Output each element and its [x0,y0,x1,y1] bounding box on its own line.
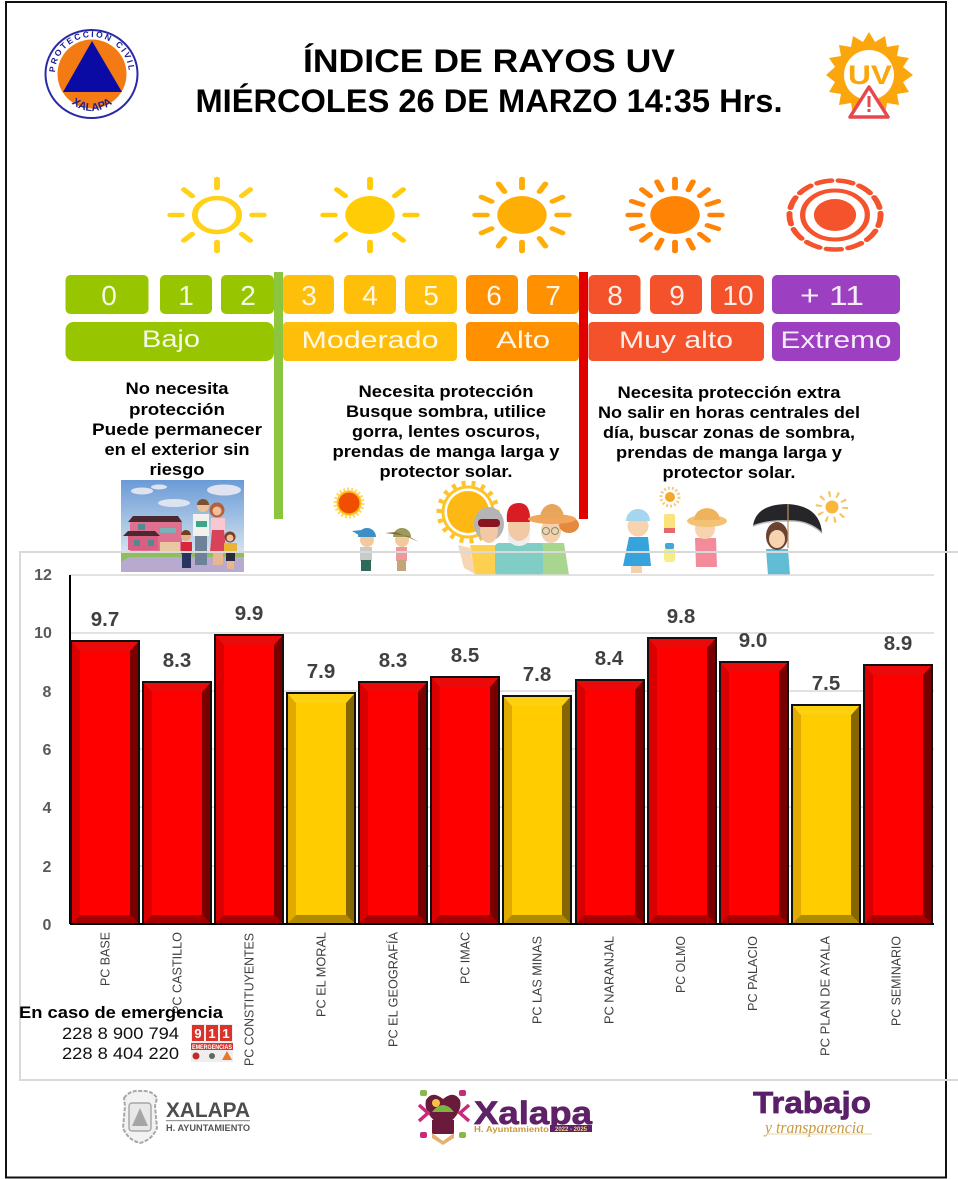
scale: UV index tiles: 7 [545,280,561,311]
icon: 911 emergency: 1 [222,1026,230,1041]
category labels: PC EL GEOGRAFÍA [386,931,400,1047]
icon: sun low [170,179,264,251]
bar: PC PLAN DE AYALA 7.5: 7.5 [812,672,840,695]
text: moderate and high risk advice: gorra, lentes oscuros, [352,422,540,441]
illustration: family outside home [121,480,244,572]
bar: PC EL GEOGRAFÍA 8.3: 8.3 [379,649,407,672]
category labels: PC EL MORAL [314,932,328,1017]
logo: Xalapa 2022-2025: 2022 - 2025 [555,1127,588,1133]
text: low risk advice: en el exterior sin [104,440,250,459]
emergency contact block: 228 8 404 220 [62,1044,179,1063]
category labels: PC CONSTITUYENTES [242,933,256,1066]
scale: risk category labels: Moderado [302,327,438,354]
scale: UV index tiles: 8 [607,280,623,311]
text: very high and extreme risk advice: Necesita protección extra [618,383,841,402]
bar: PC BASE 9.7: 9.7 [91,608,119,631]
chart: UV index by station [20,552,958,1080]
icon: sun very high [628,179,722,251]
y-axis labels [34,567,52,934]
scale: UV index tiles: 2 [240,280,256,311]
emergency contact block [19,1003,224,1063]
scale: risk category labels: Muy alto [619,327,733,354]
text: low risk advice: No necesita [126,379,229,398]
text: very high and extreme risk advice: día, buscar zonas de sombra, [603,423,855,442]
text: very high and extreme risk advice: No salir en horas centrales del [598,403,860,422]
y-axis labels: 10 [34,625,52,642]
scale: UV index tiles: 1 [178,280,194,311]
scale: risk category labels: Alto [496,327,550,354]
y-axis labels: 12 [34,567,52,584]
bar: PC PALACIO 9.0 [720,629,788,924]
bar: PC CASTILLO 8.3 [143,649,211,924]
scale: UV index tiles: 0 [101,280,117,311]
scale: UV index tiles: 3 [301,280,317,311]
bar: PC IMAC 8.5 [431,644,499,924]
scale: UV index tiles: 9 [669,280,685,311]
logo: Protección Civil Xalapa [44,29,138,119]
logo: Xalapa 2022-2025: H. Ayuntamiento [474,1125,549,1134]
bar: PC NARANJAL 8.4: 8.4 [595,647,624,670]
logo: Xalapa H. Ayuntamiento shield [123,1091,250,1143]
logo: Trabajo y transparencia [753,1085,872,1137]
category labels: PC BASE [98,932,112,986]
text: very high and extreme risk advice: protector solar. [662,463,796,482]
icon: sun high [475,179,569,251]
icon: UV warning sun: UV [848,60,892,90]
icon: sun moderate [323,179,417,251]
text: very high and extreme risk advice: prendas de manga larga y [616,443,843,462]
bar: PC EL GEOGRAFÍA 8.3 [359,649,427,924]
category labels: PC PALACIO [746,936,760,1011]
text: very high and extreme risk advice [598,383,860,482]
illustration: girl under umbrella [753,494,845,575]
category labels: PC SEMINARIO [890,936,904,1026]
text: moderate and high risk advice: Busque sombra, utilice [346,402,546,421]
bar: PC LAS MINAS 7.8 [503,663,571,924]
illustration: children with sunscreen [623,488,727,573]
category labels: PC OLMO [674,936,688,993]
bar: PC EL MORAL 7.9: 7.9 [307,660,335,683]
logo: Xalapa 2022-2025 [419,1090,592,1145]
y-axis gridlines and axis [70,575,934,924]
category labels: PC CASTILLO [170,932,184,1014]
y-axis labels: 8 [43,684,52,701]
text: low risk advice: Puede permanecer [92,420,262,439]
bar: PC CASTILLO 8.3: 8.3 [163,649,191,672]
y-axis labels: 2 [43,859,52,876]
scale: risk category labels: Bajo [142,326,200,353]
icon: 911 emergency [191,1024,233,1062]
icon: 911 emergency: EMERGENCIAS [192,1045,232,1051]
bar: PC SEMINARIO 8.9 [864,632,932,924]
bar: PC LAS MINAS 7.8: 7.8 [523,663,551,686]
illustration: children with caps [352,528,419,571]
bar: PC BASE 9.7 [71,608,139,924]
category labels [98,931,904,1066]
emergency contact block: 228 8 900 794 [62,1024,179,1043]
category labels: PC IMAC [458,932,472,984]
divider: green low-risk marker [274,272,283,519]
text: low risk advice [92,379,262,479]
bar: PC CONSTITUYENTES 9.9 [215,602,283,924]
illustration: small sun [335,489,363,517]
icon: sun extreme [789,180,881,250]
scale: UV index tiles: 4 [362,280,378,311]
category labels: PC LAS MINAS [530,936,544,1024]
divider: red high-risk marker [579,272,588,519]
icon: 911 emergency: 1 [208,1026,216,1041]
scale: risk category labels [66,322,900,361]
text: moderate and high risk advice: Necesita protección [358,382,534,401]
scale: UV index tiles: 6 [486,280,502,311]
y-axis labels: 0 [43,917,52,934]
bar: PC PLAN DE AYALA 7.5 [792,672,860,924]
title: ÍNDICE DE RAYOS UV [303,43,676,79]
emergency contact block: En caso de emergencia [19,1003,224,1022]
scale: risk category labels: Extremo [780,327,892,354]
text: moderate and high risk advice: prendas de manga larga y [332,442,560,461]
text: moderate and high risk advice: protector solar. [380,462,512,481]
bar: PC SEMINARIO 8.9: 8.9 [884,632,912,655]
category labels: PC PLAN DE AYALA [818,935,832,1056]
icon: 911 emergency: 9 [194,1026,202,1041]
category labels: PC NARANJAL [602,936,616,1024]
title: MIÉRCOLES 26 DE MARZO 14:35 Hrs. [196,83,783,119]
icon: UV warning sun [826,32,913,118]
text: low risk advice: protección [129,400,225,419]
bar: PC NARANJAL 8.4 [576,647,644,924]
y-axis labels: 6 [43,742,52,759]
logo: Trabajo y transparencia: y transparencia [763,1118,864,1137]
logo: Protección Civil Xalapa: XALAPA [72,97,112,112]
logo: Protección Civil Xalapa: PROTECCIÓN CIVIL [49,30,134,72]
bar: PC IMAC 8.5: 8.5 [451,644,479,667]
bar: PC EL MORAL 7.9 [287,660,355,924]
scale: UV index tiles: 10 [722,280,754,311]
illustration: seniors with sun protection [439,483,579,575]
chart frame [20,552,958,1080]
logo: Xalapa 2022-2025: Xalapa [474,1095,592,1131]
y-axis labels: 4 [43,800,52,817]
bar: PC PALACIO 9.0: 9.0 [739,629,767,652]
axis line [70,923,934,925]
logo: Xalapa H. Ayuntamiento shield: XALAPA [166,1099,250,1122]
logo: Trabajo y transparencia: Trabajo [753,1085,871,1120]
bar: PC OLMO 9.8: 9.8 [667,605,695,628]
scale: UV index tiles: 5 [423,280,439,311]
text: moderate and high risk advice [332,382,560,481]
bar: PC CONSTITUYENTES 9.9: 9.9 [235,602,263,625]
logo: Xalapa H. Ayuntamiento shield: H. AYUNTAMIENTO [166,1123,250,1134]
bar: PC OLMO 9.8 [648,605,716,924]
scale: UV index tiles: + 11 [800,280,864,311]
scale: UV index tiles [66,275,900,314]
text: low risk advice: riesgo [150,460,204,479]
title [196,43,783,119]
